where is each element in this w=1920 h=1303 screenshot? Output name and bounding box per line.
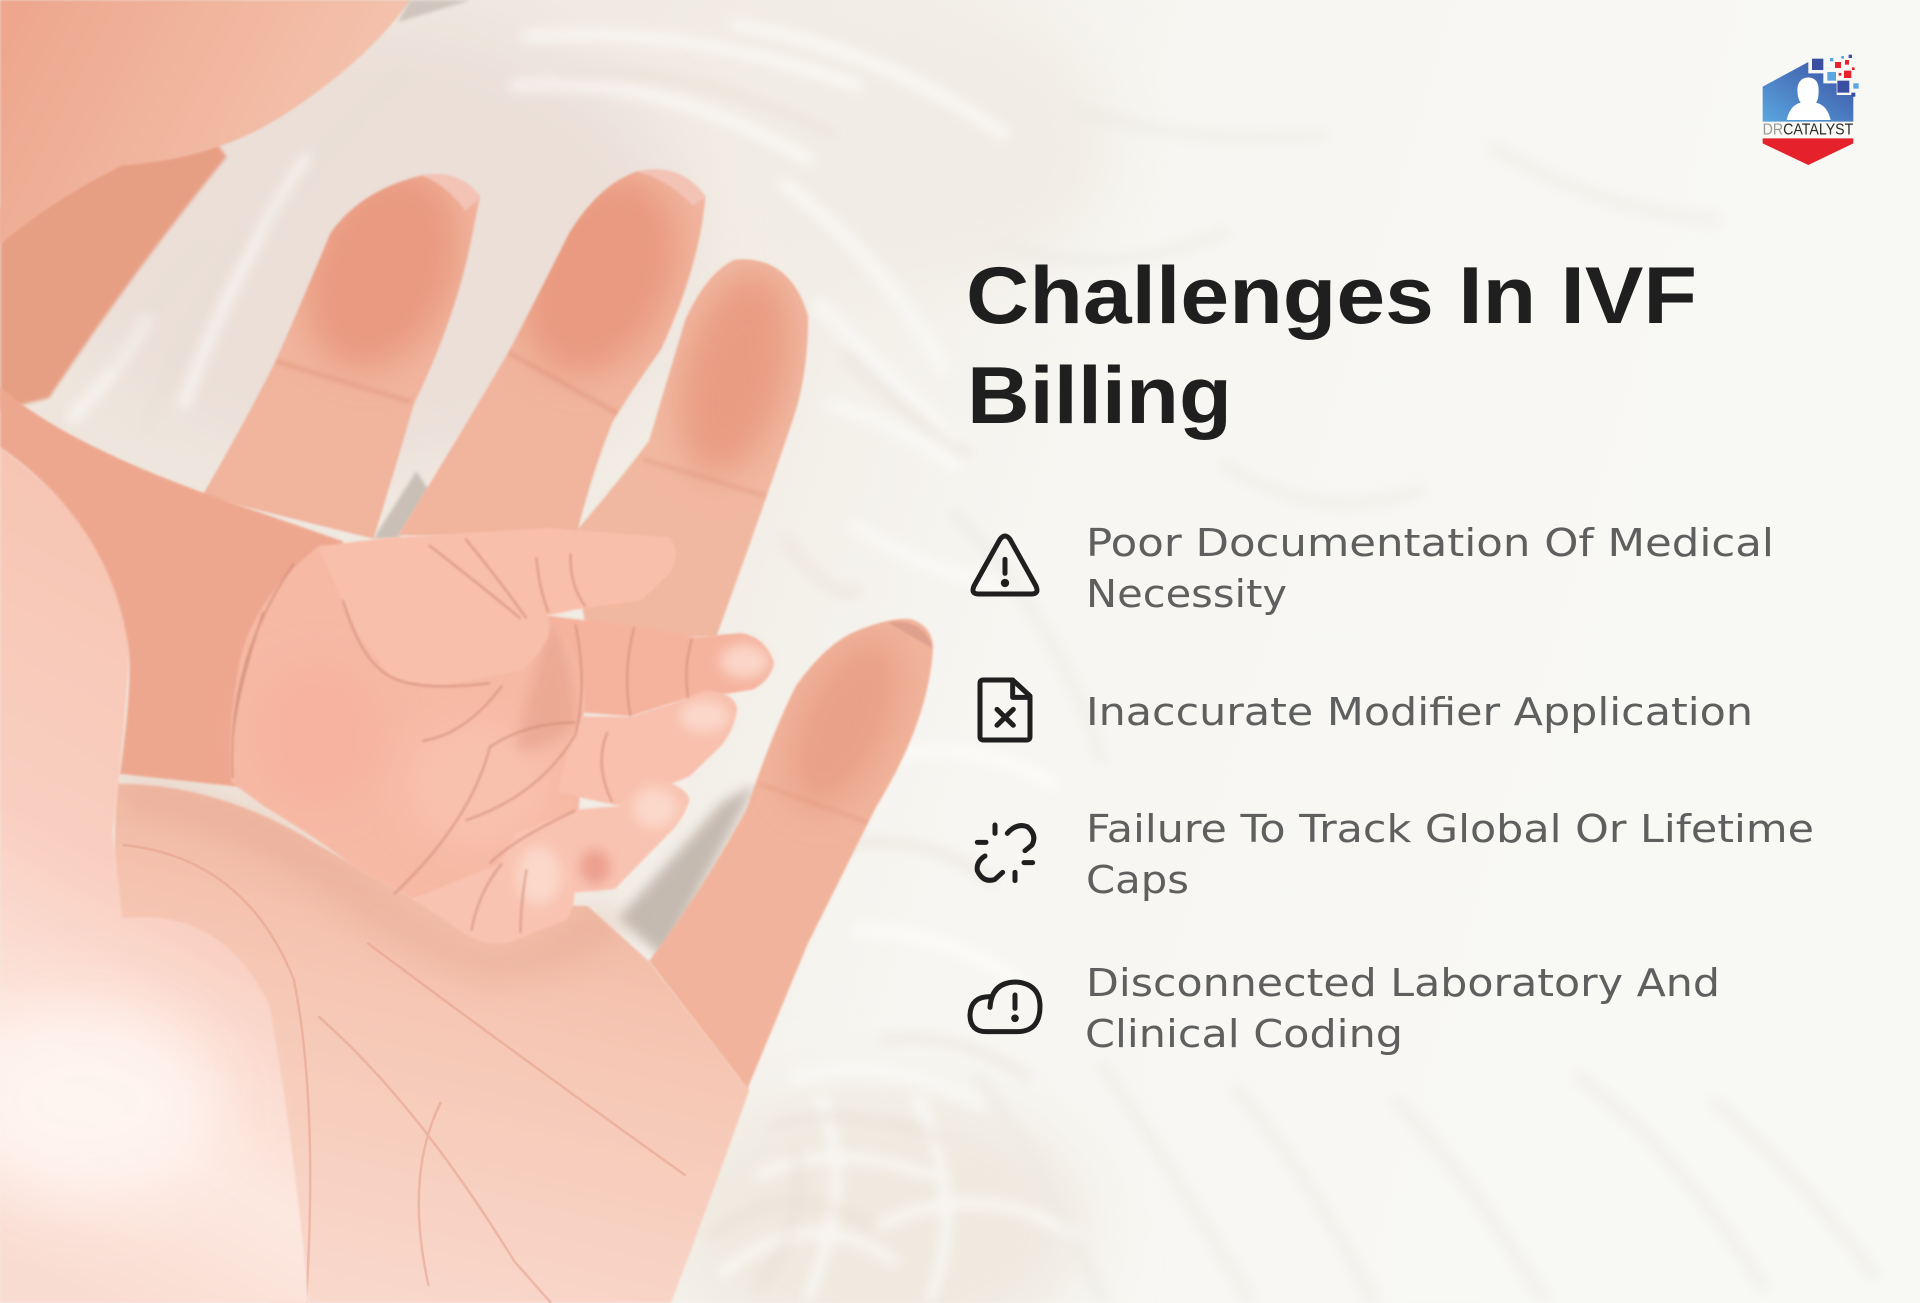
palm lines: [122, 845, 686, 1303]
baby body top-left: [0, 0, 471, 410]
baby index finger: [547, 616, 774, 716]
baby hand: [230, 528, 774, 943]
fur gap at finger bases: [373, 471, 429, 539]
baby palm: [230, 546, 588, 899]
logo shield: [1763, 62, 1853, 122]
baby thumb: [320, 528, 675, 660]
adult left thumb mound: [0, 447, 309, 1303]
adult fingers: [196, 146, 943, 1096]
logo doctor silhouette: [1787, 77, 1831, 120]
adult finger 4: [643, 612, 943, 1096]
logo pixels: [1812, 55, 1859, 97]
logo wordmark: DRCATALYST: [1763, 122, 1854, 139]
icon: cloud alert: [970, 982, 1040, 1032]
fingertip highlights: [517, 644, 769, 905]
list item: disconnected coding: Disconnected Laboratory And: [1086, 961, 1720, 1005]
adult palm: [110, 784, 749, 1303]
fur gap between baby fingers and adult finger: [618, 784, 757, 958]
baby ring and little fingers: [413, 776, 689, 943]
baby middle finger: [557, 691, 737, 806]
adult finger 1: [203, 173, 480, 540]
list item: poor documentation: Poor Documentation Of Medical: [1086, 521, 1774, 565]
adult finger 2: [398, 168, 706, 536]
list item: inaccurate modifier: Inaccurate Modifier Application: [1086, 690, 1753, 734]
list item: failure to track caps: Failure To Track Global Or Lifetime: [1086, 807, 1814, 851]
adult finger 3: [577, 258, 810, 637]
icon: file with x: [980, 680, 1030, 740]
heading: Billing: [967, 351, 1232, 441]
pinky nail pit: [580, 850, 610, 884]
list item: disconnected coding: [970, 961, 1720, 1056]
heading: Challenges In IVF: [966, 251, 1697, 341]
shadow under baby hand: [122, 796, 612, 967]
list item: inaccurate modifier: [980, 680, 1753, 740]
logo: Dr Catalyst: [1763, 55, 1859, 165]
logo red chevron: [1763, 138, 1853, 165]
list item: poor documentation: Necessity: [1086, 572, 1287, 616]
icon: warning triangle: [973, 536, 1037, 594]
list item: failure to track caps: [977, 807, 1814, 902]
list item: failure to track caps: Caps: [1086, 858, 1189, 902]
list item: poor documentation: [973, 521, 1774, 616]
baby arm: [0, 387, 355, 786]
list item: disconnected coding: Clinical Coding: [1085, 1012, 1403, 1056]
icon: broken link: [977, 825, 1034, 881]
baby hand creases: [232, 539, 692, 933]
